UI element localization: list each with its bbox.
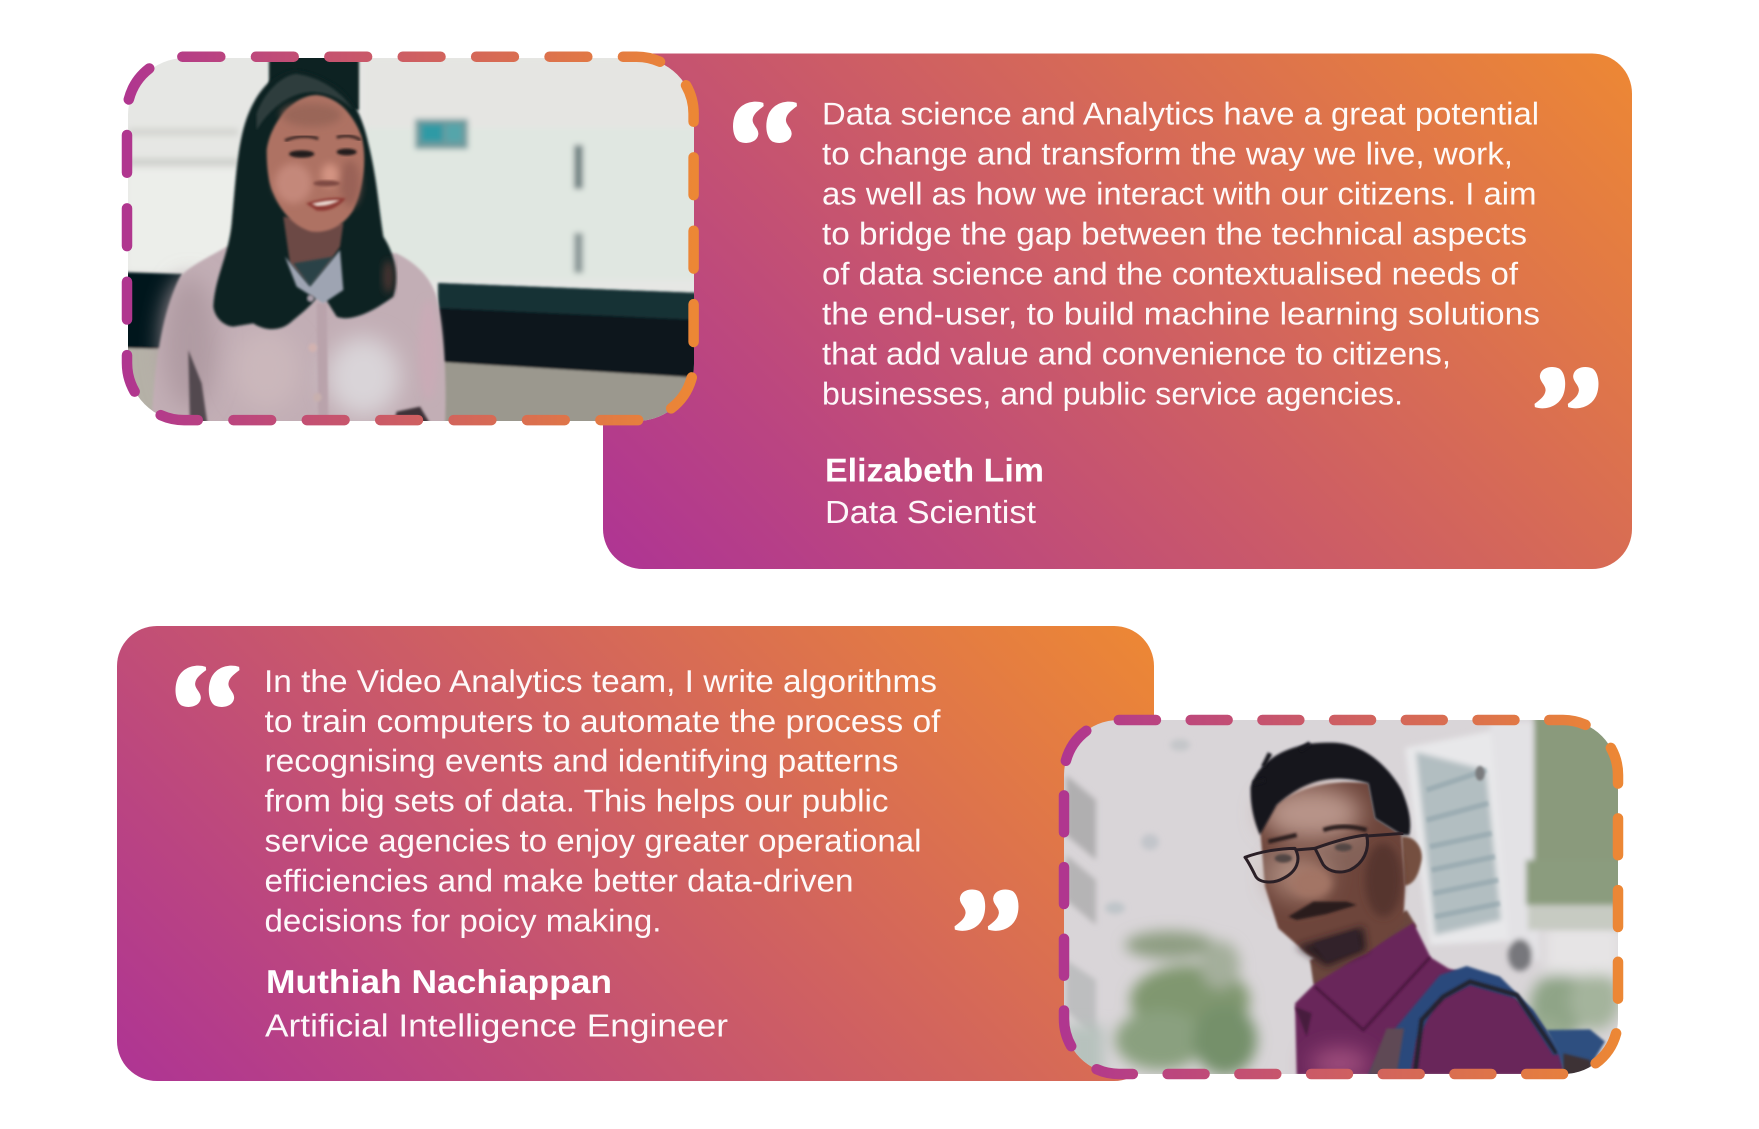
nose (321, 164, 339, 186)
shirt (152, 247, 446, 427)
hair (213, 70, 396, 329)
face (1259, 782, 1405, 967)
eyebrows and eyes (285, 136, 318, 141)
strap (1368, 966, 1562, 1075)
inner top (293, 257, 333, 287)
backpack (1547, 1029, 1605, 1075)
quote text: that add value and convenience to citizens, (822, 336, 1451, 372)
eyebrows (1268, 827, 1367, 842)
role: Data Scientist: Data Scientist (825, 494, 1036, 530)
quote text: efficiencies and make better data-driven (264, 862, 854, 898)
photo: Muthiah Nachiappan portrait (1060, 715, 1626, 1080)
dashed border: Elizabeth Lim photo (127, 57, 694, 420)
role: Artificial Intelligence Engineer: Artificial Intelligence Engineer (265, 1008, 728, 1044)
buttons (309, 344, 317, 352)
panel background gradient (603, 54, 1632, 569)
shirt (1295, 923, 1565, 1075)
collar shadow (1315, 957, 1430, 1030)
building louvres (1427, 770, 1500, 917)
panel background gradient (117, 626, 1154, 1081)
quote text: to train computers to automate the process of (264, 703, 941, 739)
quote text (264, 663, 941, 938)
mouth (306, 198, 346, 211)
collar (285, 250, 343, 303)
quote text: of data science and the contextualised needs of (822, 256, 1518, 292)
quote text: In the Video Analytics team, I write algorithms (264, 663, 937, 699)
moustache (1288, 902, 1357, 920)
tall building (1406, 732, 1508, 945)
icon: opening quote mark (733, 102, 797, 143)
neck (283, 217, 343, 283)
quote text: Data science and Analytics have a great potential (822, 96, 1539, 132)
quote text: to change and transform the way we live, work, (822, 136, 1513, 172)
name: Elizabeth Lim: Elizabeth Lim (825, 452, 1044, 488)
eyes (1275, 854, 1292, 863)
panel: Muthiah Nachiappan testimonial (117, 626, 1154, 1081)
quote text: as well as how we interact with our citizens. I aim (822, 176, 1536, 212)
quote text: businesses, and public service agencies. (822, 376, 1403, 412)
panel: Elizabeth Lim testimonial (603, 54, 1632, 569)
quote text: decisions for poicy making. (264, 902, 662, 938)
trees (1125, 931, 1215, 959)
hair (1251, 743, 1410, 835)
quote text: the end-user, to build machine learning solutions (822, 296, 1540, 332)
beard (1297, 927, 1367, 967)
window frame behind head (269, 50, 359, 110)
quote text: recognising events and identifying patterns (264, 742, 898, 778)
icon: opening quote mark (176, 666, 239, 707)
quote text: to bridge the gap between the technical aspects (822, 216, 1527, 252)
quote text: service agencies to enjoy greater operational (264, 822, 921, 858)
glasses (1245, 833, 1403, 882)
ear (1402, 837, 1422, 886)
icon: closing quote mark (1535, 367, 1598, 408)
placket (318, 304, 328, 415)
photo: Elizabeth Lim portrait (120, 50, 700, 430)
left buildings (1066, 775, 1096, 860)
face (267, 95, 364, 232)
icon: closing quote mark (955, 890, 1018, 931)
quote text: from big sets of data. This helps our public (264, 782, 888, 818)
green building (1530, 720, 1618, 864)
name: Muthiah Nachiappan: Muthiah Nachiappan (266, 963, 612, 1000)
building window marks (1475, 766, 1485, 781)
quote text (822, 96, 1540, 412)
dashed border: Muthiah Nachiappan photo (1064, 720, 1618, 1074)
neck (1308, 908, 1418, 986)
